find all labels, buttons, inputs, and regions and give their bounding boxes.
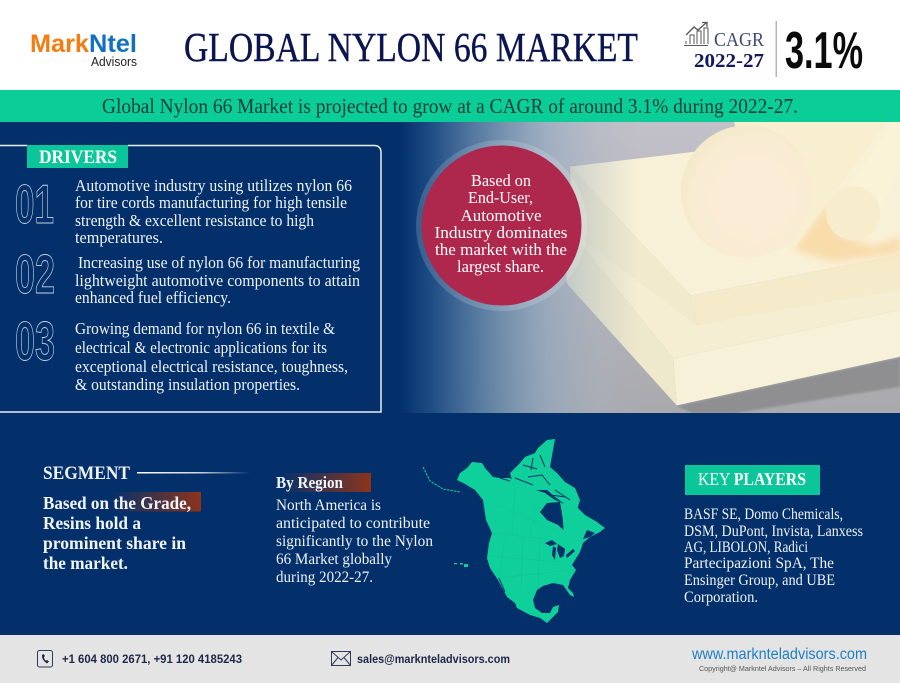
driver 2 text: Increasing use of nylon 66 for manufacturing [78,253,360,272]
key players list: DSM, DuPont, Invista, Lanxess [684,523,863,540]
CAGR label: 2022-27 [694,50,764,72]
callout: end-user circle: Industry dominates [434,223,568,242]
CAGR label: CAGR [714,29,765,51]
segment text: prominent share in [43,533,186,553]
region text: significantly to the Nylon [276,533,433,550]
icon: email [332,652,350,666]
website: www.marknteladvisors.com [691,646,867,663]
number 03: 03 [15,310,55,372]
subtitle banner [0,90,900,122]
driver 2 text [75,253,360,307]
driver 1 text: strength & excellent resistance to high [75,211,315,230]
logo: MarkNtel Advisors: Ntel [89,30,137,58]
segment text [43,493,191,573]
warm shadow under rods [793,205,900,262]
divider [776,21,777,77]
callout: end-user circle: End-User, [468,188,533,207]
number 02: 02 [15,243,55,305]
region heading: By Region [276,473,343,492]
key players heading [685,465,820,495]
driver 3 text [75,319,348,394]
icon: CAGR bar chart with arrow [684,22,708,46]
number 01: 01 [15,173,54,235]
logo: MarkNtel Advisors: Mark [30,30,89,58]
key players list [684,506,863,606]
header band [0,0,900,90]
driver 1 text: temperatures. [75,228,163,247]
segment text: Based on the Grade, [43,493,191,513]
key players list: Ensinger Group, and UBE [684,572,835,589]
callout: end-user circle: the market with the [435,240,567,259]
CAGR label [694,29,765,72]
region highlight [280,473,371,492]
driver 2 text: lightweight automotive components to attain [75,271,360,290]
photo: nylon sheets and rods [380,120,900,413]
segment heading: SEGMENT [43,463,130,484]
region text: North America is [276,497,381,514]
copyright: Copyright@ Markntel Advisors – All Rights Reserved [699,664,866,673]
large rod [733,120,888,253]
driver 1 text [75,176,352,247]
drivers heading: DRIVERS [39,147,117,168]
fade overlay [380,122,626,413]
driver 1 text: Automotive industry using utilizes nylon 66 [75,176,352,195]
driver 1 text: for tire cords manufacturing for high tensile [75,193,347,212]
driver 3 text: electrical & electronic applications for its [75,338,327,357]
segment text: the market. [43,553,128,573]
logo: MarkNtel Advisors [30,30,137,69]
subtitle banner: Global Nylon 66 Market is projected to grow at a CAGR of around 3.1% during 2022-27. [102,94,798,118]
footer [0,635,900,683]
phone numbers: +1 604 800 2671, +91 120 4185243 [62,652,242,666]
segment rule [137,472,250,474]
callout: end-user circle [416,140,587,311]
callout: end-user circle: Automotive [460,206,542,225]
CAGR value: 3.1% [785,22,863,80]
grade highlight [110,492,201,512]
driver 3 text: exceptional electrical resistance, toughness, [75,357,348,376]
title: GLOBAL NYLON 66 MARKET [184,24,638,70]
key players list: Partecipazioni SpA, The [684,555,834,572]
panel border [0,146,381,412]
region text: during 2022-27. [276,569,373,586]
small rod [833,122,900,232]
segment block [43,463,250,573]
email address: sales@marknteladvisors.com [357,652,510,666]
key players [684,465,863,606]
by region block [276,473,433,586]
upper sheet [570,120,900,296]
logo: MarkNtel Advisors: Advisors [91,54,137,69]
callout: end-user circle: largest share. [457,257,544,276]
icon: phone [38,650,52,667]
map: North America [423,439,605,623]
segment text: Resins hold a [43,513,141,533]
region text [276,497,433,586]
driver 2 text: enhanced fuel efficiency. [75,288,231,307]
main navy background [0,122,900,635]
key players list: AG, LIBOLON, Radici [684,539,809,556]
lower sheet [580,238,900,358]
key players heading: KEY PLAYERS [698,469,806,489]
key players list: BASF SE, Domo Chemicals, [684,506,843,523]
driver 3 text: Growing demand for nylon 66 in textile & [75,319,335,338]
region text: anticipated to contribute [276,515,430,532]
driver 3 text: & outstanding insulation properties. [75,375,300,394]
panel: drivers [0,145,381,412]
region text: 66 Market globally [276,551,392,568]
callout: end-user circle: Based on [471,171,531,190]
key players list: Corporation. [684,589,758,606]
